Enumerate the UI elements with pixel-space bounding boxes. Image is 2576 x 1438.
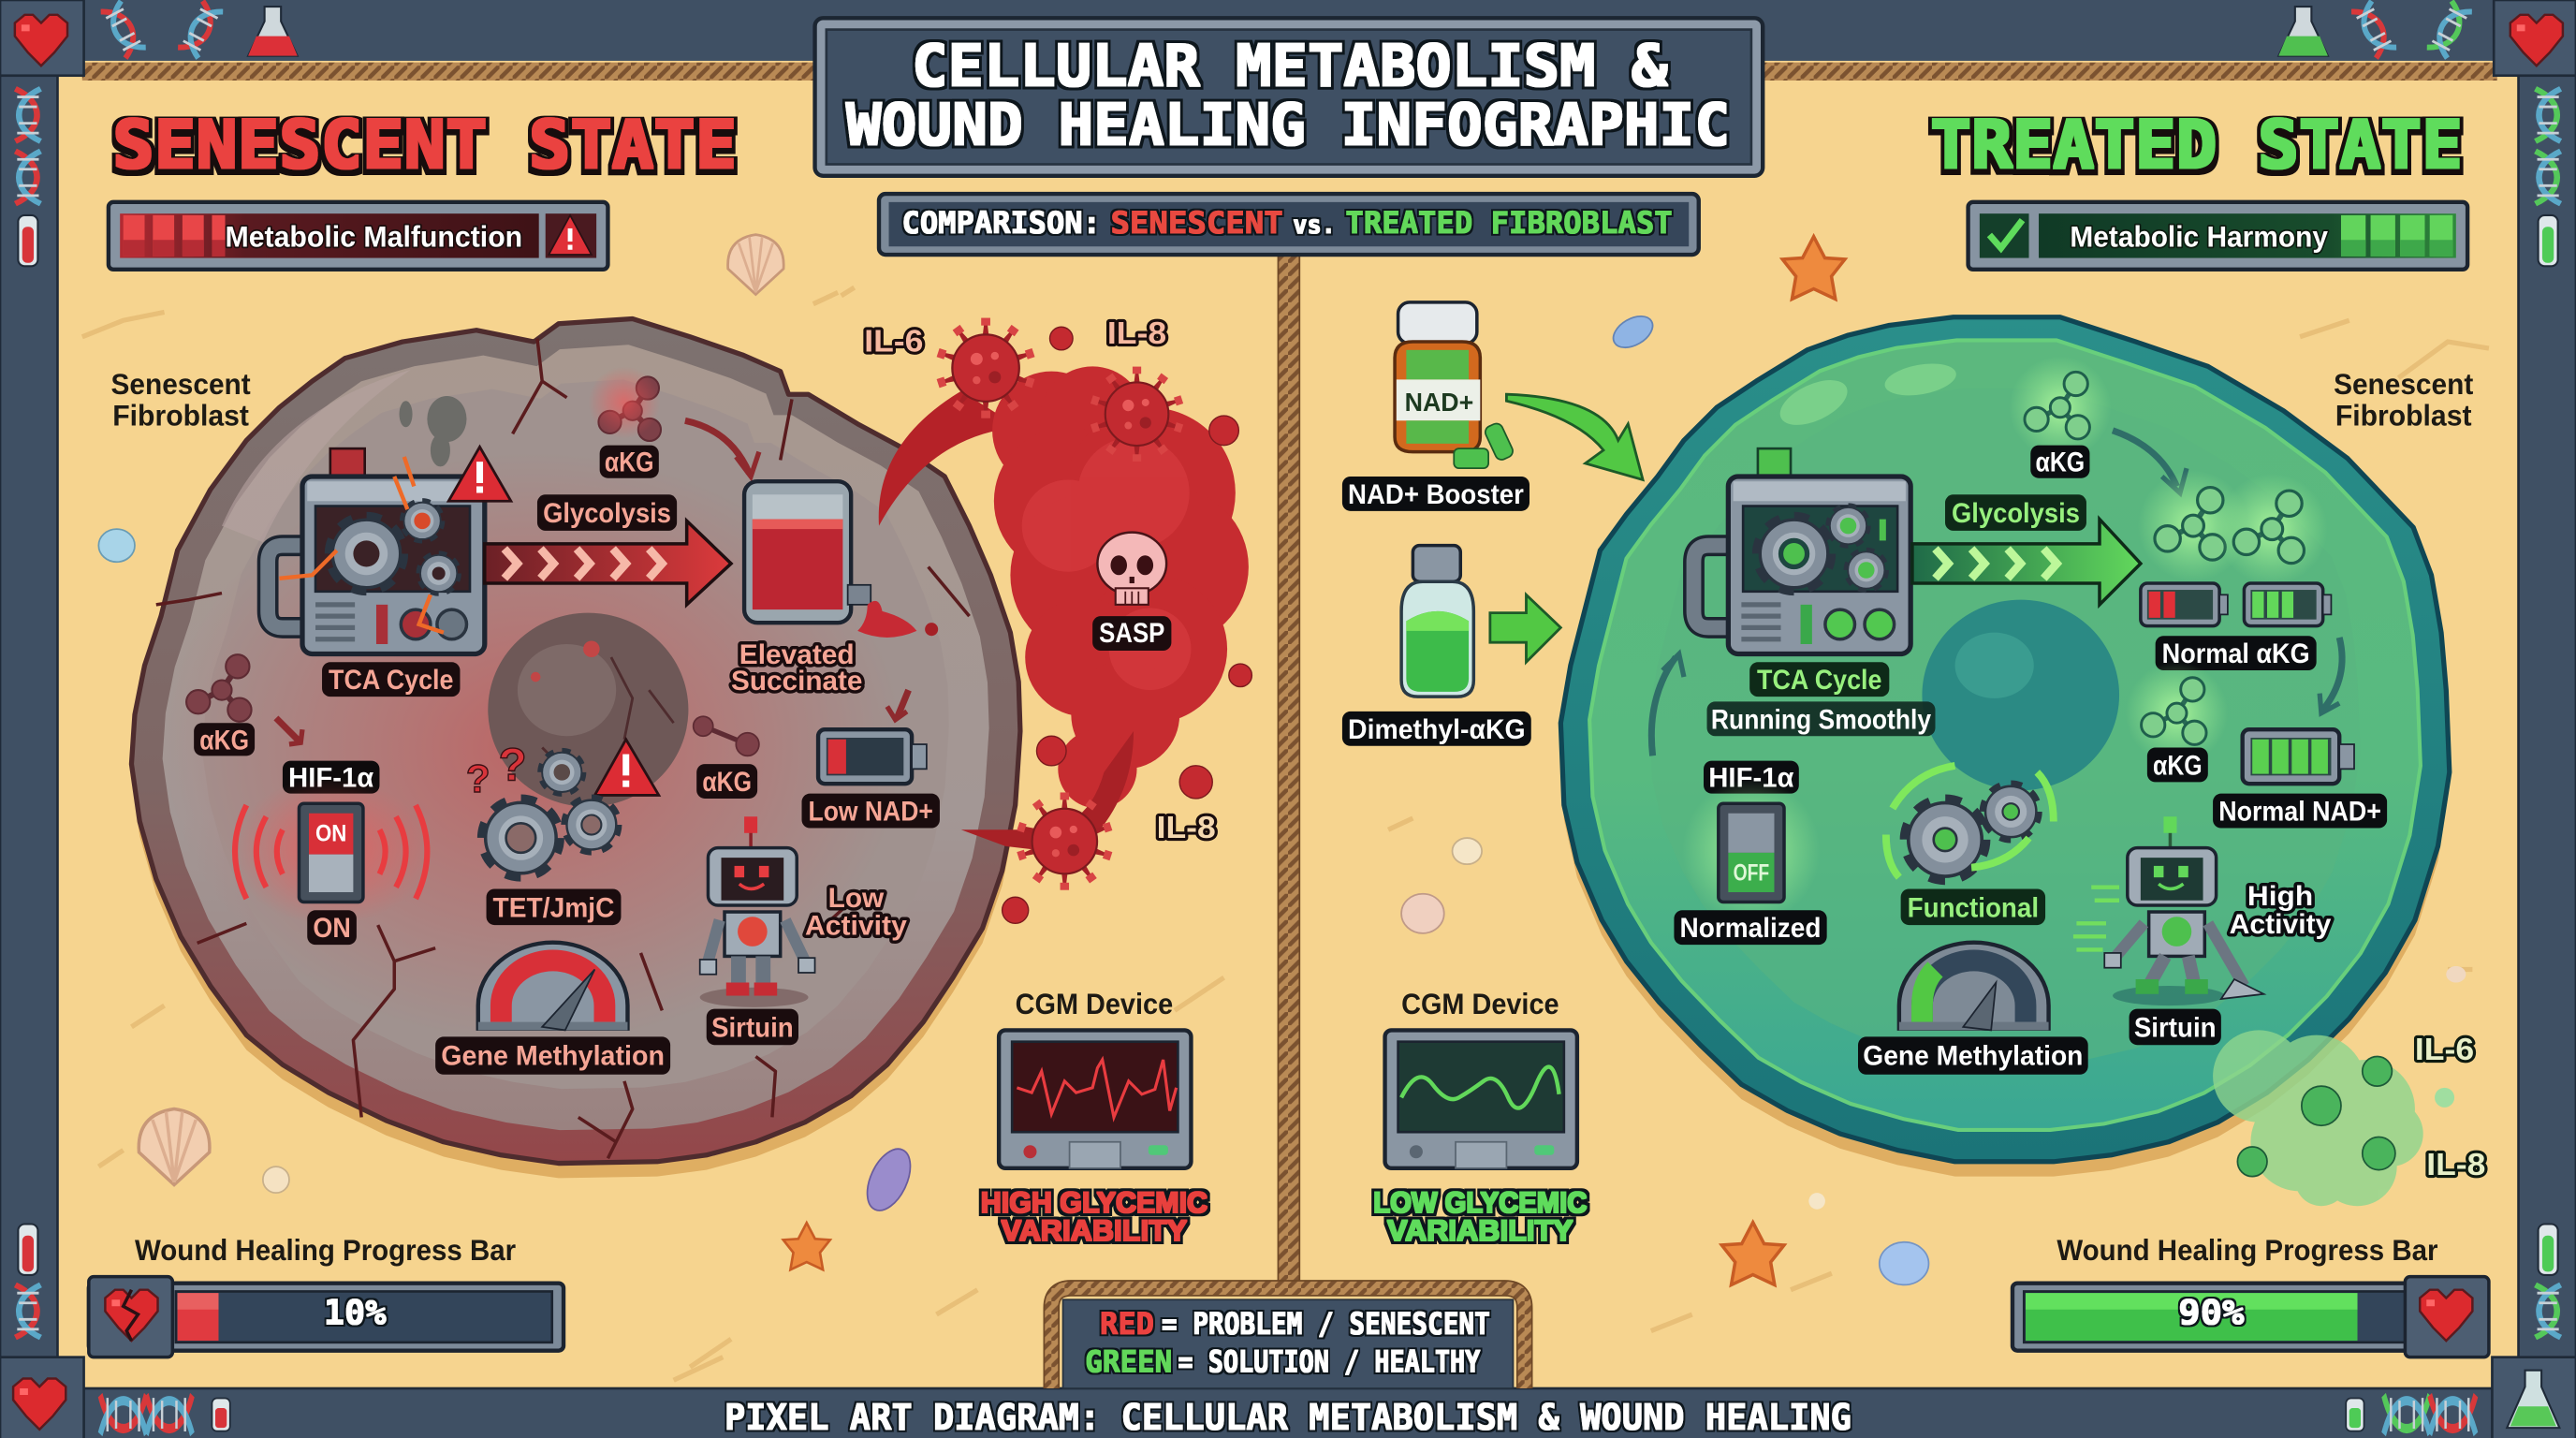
icons: footer right (2346, 1395, 2476, 1434)
label: normal NAD: Normal NAD+ (2218, 797, 2381, 828)
comparison banner: TREATED FIBROBLAST (1345, 207, 1673, 241)
title text: WOUND HEALING INFOGRAPHIC (846, 92, 1730, 158)
virus: IL-8 upper (1090, 367, 1183, 462)
label: low NAD: Low NAD+ (809, 797, 933, 828)
flow arrows (276, 420, 909, 744)
arrow: glycolysis right (1912, 520, 2141, 605)
label: gene methylation right: Gene Methylation (1863, 1040, 2083, 1071)
icon: confused gears and warning (466, 740, 659, 873)
label: senescent fibroblast right: Fibroblast (2335, 399, 2472, 433)
frame: left band (0, 76, 57, 1373)
label: TET/JmjC: TET/JmjC (493, 892, 614, 923)
label: low activity: Activity (805, 911, 907, 942)
vial: dimethyl aKG (1401, 546, 1473, 697)
label: aKG left: αKG (199, 725, 249, 756)
label: CGM right: CGM Device (1401, 987, 1559, 1020)
comparison banner: COMPARISON: (902, 207, 1101, 241)
switch: HIF-1a on (232, 777, 429, 925)
legend panel: GREEN (1085, 1345, 1172, 1379)
label: running smoothly: Running Smoothly (1711, 704, 1931, 735)
robot: sirtuin low activity (700, 816, 815, 1007)
label: aKG center: αKG (702, 767, 752, 798)
frame: top rope left (82, 63, 816, 81)
frame: top rope right (1761, 63, 2497, 81)
label: NAD+ booster: NAD+ Booster (1348, 479, 1524, 510)
status bar: metabolic malfunction: Metabolic Malfunction (225, 219, 522, 253)
label: glycolysis right: Glycolysis (1952, 498, 2080, 529)
icon: functional gears (1886, 766, 2054, 877)
battery: normal NAD (2243, 729, 2354, 784)
icons: top right row (2278, 1, 2472, 58)
molecule: aKG center right (2126, 662, 2228, 764)
corner box top right with heart (2494, 0, 2576, 76)
title panel (815, 18, 1763, 176)
icon: skull (1097, 533, 1166, 605)
comparison banner: SENESCENT (1110, 207, 1283, 241)
icon: warning triangle (448, 447, 511, 501)
label: dimethyl aKG: Dimethyl-αKG (1348, 714, 1526, 745)
bottle: NAD+ booster: NAD+ (1405, 388, 1473, 417)
center rope divider (1278, 246, 1299, 1284)
arrow: glycolysis left (485, 521, 731, 605)
nucleus (488, 613, 688, 807)
label: sirtuin right: Sirtuin (2134, 1012, 2217, 1043)
sand texture marks (82, 287, 2489, 1380)
label: low glycemic variability (1373, 1185, 1587, 1247)
label: aKG top: αKG (605, 448, 654, 478)
machine: broken TCA cycle (268, 396, 511, 654)
label: IL-6 right: IL-6 (2415, 1033, 2474, 1067)
red droplets (1003, 327, 1251, 923)
label: gene methylation left: Gene Methylation (441, 1040, 665, 1071)
heading: treated state: TREATED STATE (1930, 107, 2463, 183)
label: IL-8 right: IL-8 (2426, 1148, 2485, 1182)
label: high activity (2230, 881, 2332, 940)
label: aKG center right: αKG (2153, 750, 2203, 781)
corner box bottom left with heart (0, 1357, 84, 1438)
battery pair: low to normal (2141, 583, 2331, 626)
frame: bottom band (0, 1388, 2576, 1438)
label: high glycemic variability: HIGH GLYCEMIC (981, 1185, 1208, 1219)
icons: lower right column (2536, 1224, 2561, 1338)
icons: footer left (100, 1395, 230, 1434)
label: IL-8 upper: IL-8 (1107, 316, 1166, 351)
arrow: vial to cell (1490, 594, 1560, 662)
label: wound bar right: Wound Healing Progress Bar (2056, 1233, 2438, 1267)
cell body (131, 318, 1020, 1164)
label: high glycemic variability (981, 1185, 1208, 1247)
label: senescent fibroblast left: Fibroblast (112, 399, 249, 433)
label: low activity (805, 883, 907, 942)
icons: lower left column (15, 1224, 40, 1338)
bottle: NAD+ booster (1395, 302, 1515, 468)
footer title: PIXEL ART DIAGRAM: CELLULAR METABOLISM & WOUND HEALING (724, 1397, 1852, 1438)
molecule: aKG center (694, 716, 759, 756)
label: elevated succinate (731, 639, 862, 697)
green cytokine cloud (2213, 1030, 2454, 1206)
cracks (156, 339, 970, 1158)
battery: low NAD (818, 729, 927, 784)
heading: senescent state: SENESCENT STATE (112, 107, 737, 183)
switch: HIF-1a off (1682, 779, 1821, 923)
icon: confused gears and warning: ? (499, 741, 527, 791)
label: senescent fibroblast right: Senescent (2334, 367, 2474, 401)
icons: left column (15, 89, 40, 266)
label: ON: ON (313, 913, 351, 944)
icons: right column (2536, 89, 2561, 266)
title text: CELLULAR METABOLISM & (912, 33, 1668, 99)
arrow: booster to cell (1506, 394, 1643, 479)
comparison banner: vs. (1293, 212, 1336, 240)
molecule: aKG top right (2009, 356, 2112, 459)
icons: top left row (101, 1, 298, 58)
label: CGM left: CGM Device (1016, 987, 1173, 1020)
beaker: elevated succinate (744, 481, 938, 638)
label: TCA cycle right: TCA Cycle (1757, 665, 1881, 696)
cell body (1560, 317, 2450, 1162)
icon: check mark (1989, 220, 2022, 248)
progress bar: 90 percent (2012, 1277, 2489, 1357)
icon: broken heart (105, 1290, 158, 1341)
icon: confused gears and warning: ? (466, 756, 490, 800)
flow arrows (1651, 431, 2342, 756)
label: low glycemic variability: VARIABILITY (1387, 1213, 1573, 1247)
label: IL-8 lower: IL-8 (1157, 811, 1216, 845)
molecules: aKG pair (2138, 470, 2328, 584)
label: senescent fibroblast right (2334, 367, 2474, 433)
decorative beach items (98, 235, 2466, 1284)
switch: HIF-1a on: ON (315, 822, 346, 847)
label: senescent fibroblast left (111, 367, 251, 433)
panel: senescent cell (131, 318, 1020, 1178)
label: wound bar left: Wound Healing Progress Bar (135, 1233, 516, 1267)
label: low activity: Low (828, 883, 885, 914)
label: elevated succinate: Succinate (731, 666, 862, 697)
label: functional: Functional (1908, 892, 2039, 923)
legend panel (1051, 1288, 1525, 1388)
gauge: gene methylation left (478, 943, 627, 1030)
gauge: gene methylation right (1899, 943, 2049, 1030)
label: normalized: Normalized (1680, 913, 1822, 944)
SASP cloud: red smoke (879, 366, 1249, 855)
status bar: metabolic harmony: Metabolic Harmony (2070, 219, 2328, 253)
title text (846, 33, 1730, 158)
label: high activity: Activity (2230, 909, 2332, 940)
virus: IL-6 (937, 318, 1035, 418)
monitor: low glycemic (1385, 1030, 1577, 1168)
progress bar: 10 percent (89, 1277, 564, 1357)
panel: treated cell (1560, 317, 2450, 1177)
label: senescent fibroblast left: Senescent (111, 367, 251, 401)
virus: IL-8 lower (1017, 792, 1112, 890)
cell shadow (1560, 332, 2450, 1177)
label: HIF-1a right: HIF-1α (1708, 763, 1794, 794)
label: TCA cycle left: TCA Cycle (329, 665, 453, 696)
status bar: metabolic harmony (1969, 202, 2467, 270)
legend panel: RED (1100, 1308, 1154, 1342)
icon: warning triangle (549, 215, 592, 255)
label: glycolysis left: Glycolysis (543, 498, 671, 529)
comparison banner (879, 194, 1699, 255)
machine: healthy TCA cycle (1693, 448, 1910, 654)
label: high activity: High (2247, 881, 2313, 912)
frame: top band (0, 0, 2576, 61)
switch: HIF-1a off: OFF (1734, 861, 1769, 887)
label: SASP: SASP (1099, 618, 1164, 649)
molecule: aKG top (588, 366, 661, 441)
progress bar: 90 percent: 90% (2178, 1293, 2244, 1333)
legend panel: = PROBLEM / SENESCENT (1162, 1308, 1490, 1342)
status bar: metabolic malfunction (109, 202, 607, 270)
molecule: aKG left (186, 654, 252, 722)
icon: heart (2420, 1290, 2472, 1341)
label: high glycemic variability: VARIABILITY (1002, 1213, 1187, 1247)
monitor: high glycemic (999, 1030, 1191, 1168)
label: low glycemic variability: LOW GLYCEMIC (1373, 1185, 1587, 1219)
corner box top left with heart (0, 0, 84, 76)
label: normal aKG: Normal αKG (2162, 638, 2310, 669)
label: aKG top right: αKG (2036, 448, 2085, 478)
label: sirtuin left: Sirtuin (711, 1012, 794, 1043)
nucleus (1922, 600, 2119, 790)
robot: sirtuin high activity (2073, 816, 2263, 1005)
label: IL-6: IL-6 (864, 325, 923, 360)
label: HIF-1a left: HIF-1α (288, 763, 374, 794)
cell shadow (131, 333, 1020, 1178)
frame: right band (2519, 76, 2576, 1373)
legend panel: = SOLUTION / HEALTHY (1178, 1345, 1480, 1379)
label: elevated succinate: Elevated (739, 639, 855, 670)
icon: smoke (400, 396, 466, 466)
progress bar: 10 percent: 10% (324, 1293, 386, 1333)
corner box bottom right with flask (2492, 1357, 2576, 1438)
